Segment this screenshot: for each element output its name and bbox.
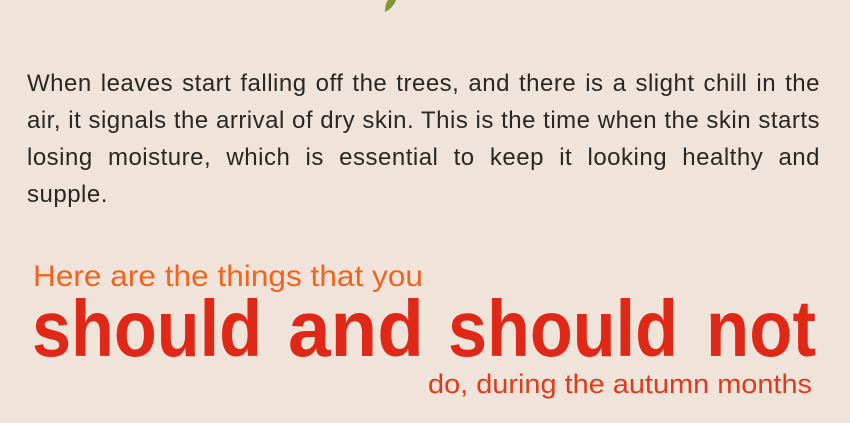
icon: leaf tip [385,0,396,12]
text block: introduction: losing moisture, which is essential to keep it looking healthy and [27,144,820,171]
heading line: closing: do, during the autumn months [428,369,812,399]
text block: introduction: supple. [27,181,108,208]
heading line: main: should [448,284,678,373]
text block: introduction [27,70,820,208]
heading line: main [32,284,816,373]
heading line: main: not [706,284,816,373]
heading line: main: and [288,284,424,373]
text block: introduction: When leaves start falling off the trees, and there is a slight chill in the [27,70,820,97]
heading line: intro: Here are the things that you [33,260,423,293]
heading line: main: should [32,284,262,373]
text block: introduction: air, it signals the arrival of dry skin. This is the time when the skin starts [27,107,820,134]
